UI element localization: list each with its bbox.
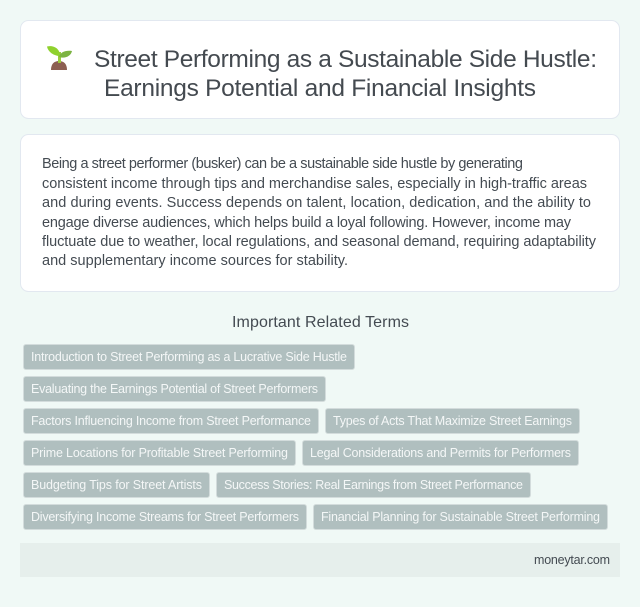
section heading: Important Related Terms xyxy=(232,314,409,331)
chip: budgeting tips: Budgeting Tips for Street Artists xyxy=(31,478,202,492)
summary text: and supplementary income sources for stability. xyxy=(42,253,348,269)
chip: financial planning: Financial Planning for Sustainable Street Performing xyxy=(321,510,600,524)
summary text: and during events. Success depends on talent, location, dedication, and the ability to xyxy=(42,195,591,211)
title xyxy=(94,46,597,102)
chip: diversifying income: Diversifying Income Streams for Street Performers xyxy=(31,510,299,524)
chip: prime locations: Prime Locations for Profitable Street Performing xyxy=(31,446,288,460)
summary text: consistent income through tips and merchandise sales, especially in high-traffic areas xyxy=(42,176,587,192)
summary text xyxy=(42,156,597,269)
chip: success stories: Success Stories: Real Earnings from Street Performance xyxy=(224,478,523,492)
chip: types of acts: Types of Acts That Maximize Street Earnings xyxy=(333,414,572,428)
term chips xyxy=(24,344,608,530)
footer bar xyxy=(20,543,620,577)
chip: types of acts xyxy=(326,408,580,434)
chip: legal considerations xyxy=(302,440,578,466)
chip: budgeting tips xyxy=(24,472,210,498)
chip: prime locations xyxy=(24,440,296,466)
header panel xyxy=(20,20,620,118)
chip: introduction xyxy=(24,344,354,370)
chip: income factors xyxy=(24,408,318,434)
summary panel xyxy=(20,134,620,292)
summary text: fluctuate due to weather, local regulations, and seasonal demand, requiring adaptability xyxy=(42,234,597,250)
chip: financial planning xyxy=(314,504,608,530)
summary text: engage diverse audiences, which helps build a loyal following. However, income may xyxy=(42,215,572,231)
chip: success stories xyxy=(216,472,530,498)
title: Street Performing as a Sustainable Side Hustle: xyxy=(94,46,597,73)
icon: seedling xyxy=(47,46,72,70)
chip: legal considerations: Legal Considerations and Permits for Performers xyxy=(310,446,571,460)
chip: earnings potential xyxy=(24,376,326,402)
chip: introduction: Introduction to Street Performing as a Lucrative Side Hustle xyxy=(31,350,347,364)
chip: earnings potential: Evaluating the Earnings Potential of Street Performers xyxy=(31,382,318,396)
summary text: Being a street performer (busker) can be a sustainable side hustle by generating xyxy=(42,156,523,172)
title: Earnings Potential and Financial Insights xyxy=(104,75,536,102)
chip: diversifying income xyxy=(24,504,306,530)
footer source text: moneytar.com xyxy=(534,553,610,567)
chip: income factors: Factors Influencing Income from Street Performance xyxy=(31,414,311,428)
